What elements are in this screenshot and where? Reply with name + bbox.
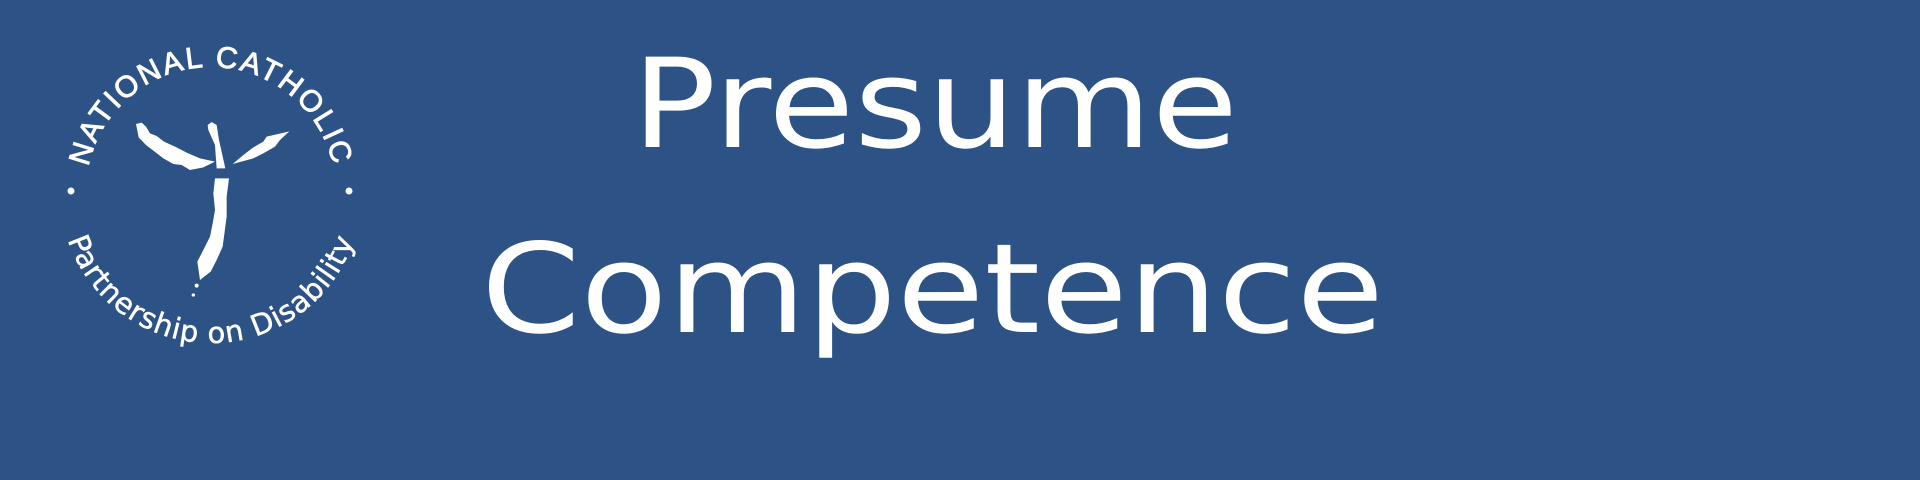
icon: stylised figure xyxy=(136,122,289,297)
logo separator dot right xyxy=(346,188,352,194)
logo: National Catholic Partnership on Disability xyxy=(68,46,356,347)
logo text: National Catholic: NATIONAL CATHOLIC xyxy=(68,46,352,165)
logo text: Partnership on Disability: Partnership on Disability xyxy=(68,234,356,347)
title line: Presume: Presume xyxy=(632,33,1238,177)
title line: Competence: Competence xyxy=(481,218,1384,362)
title xyxy=(481,33,1384,362)
logo separator dot left xyxy=(68,188,74,194)
